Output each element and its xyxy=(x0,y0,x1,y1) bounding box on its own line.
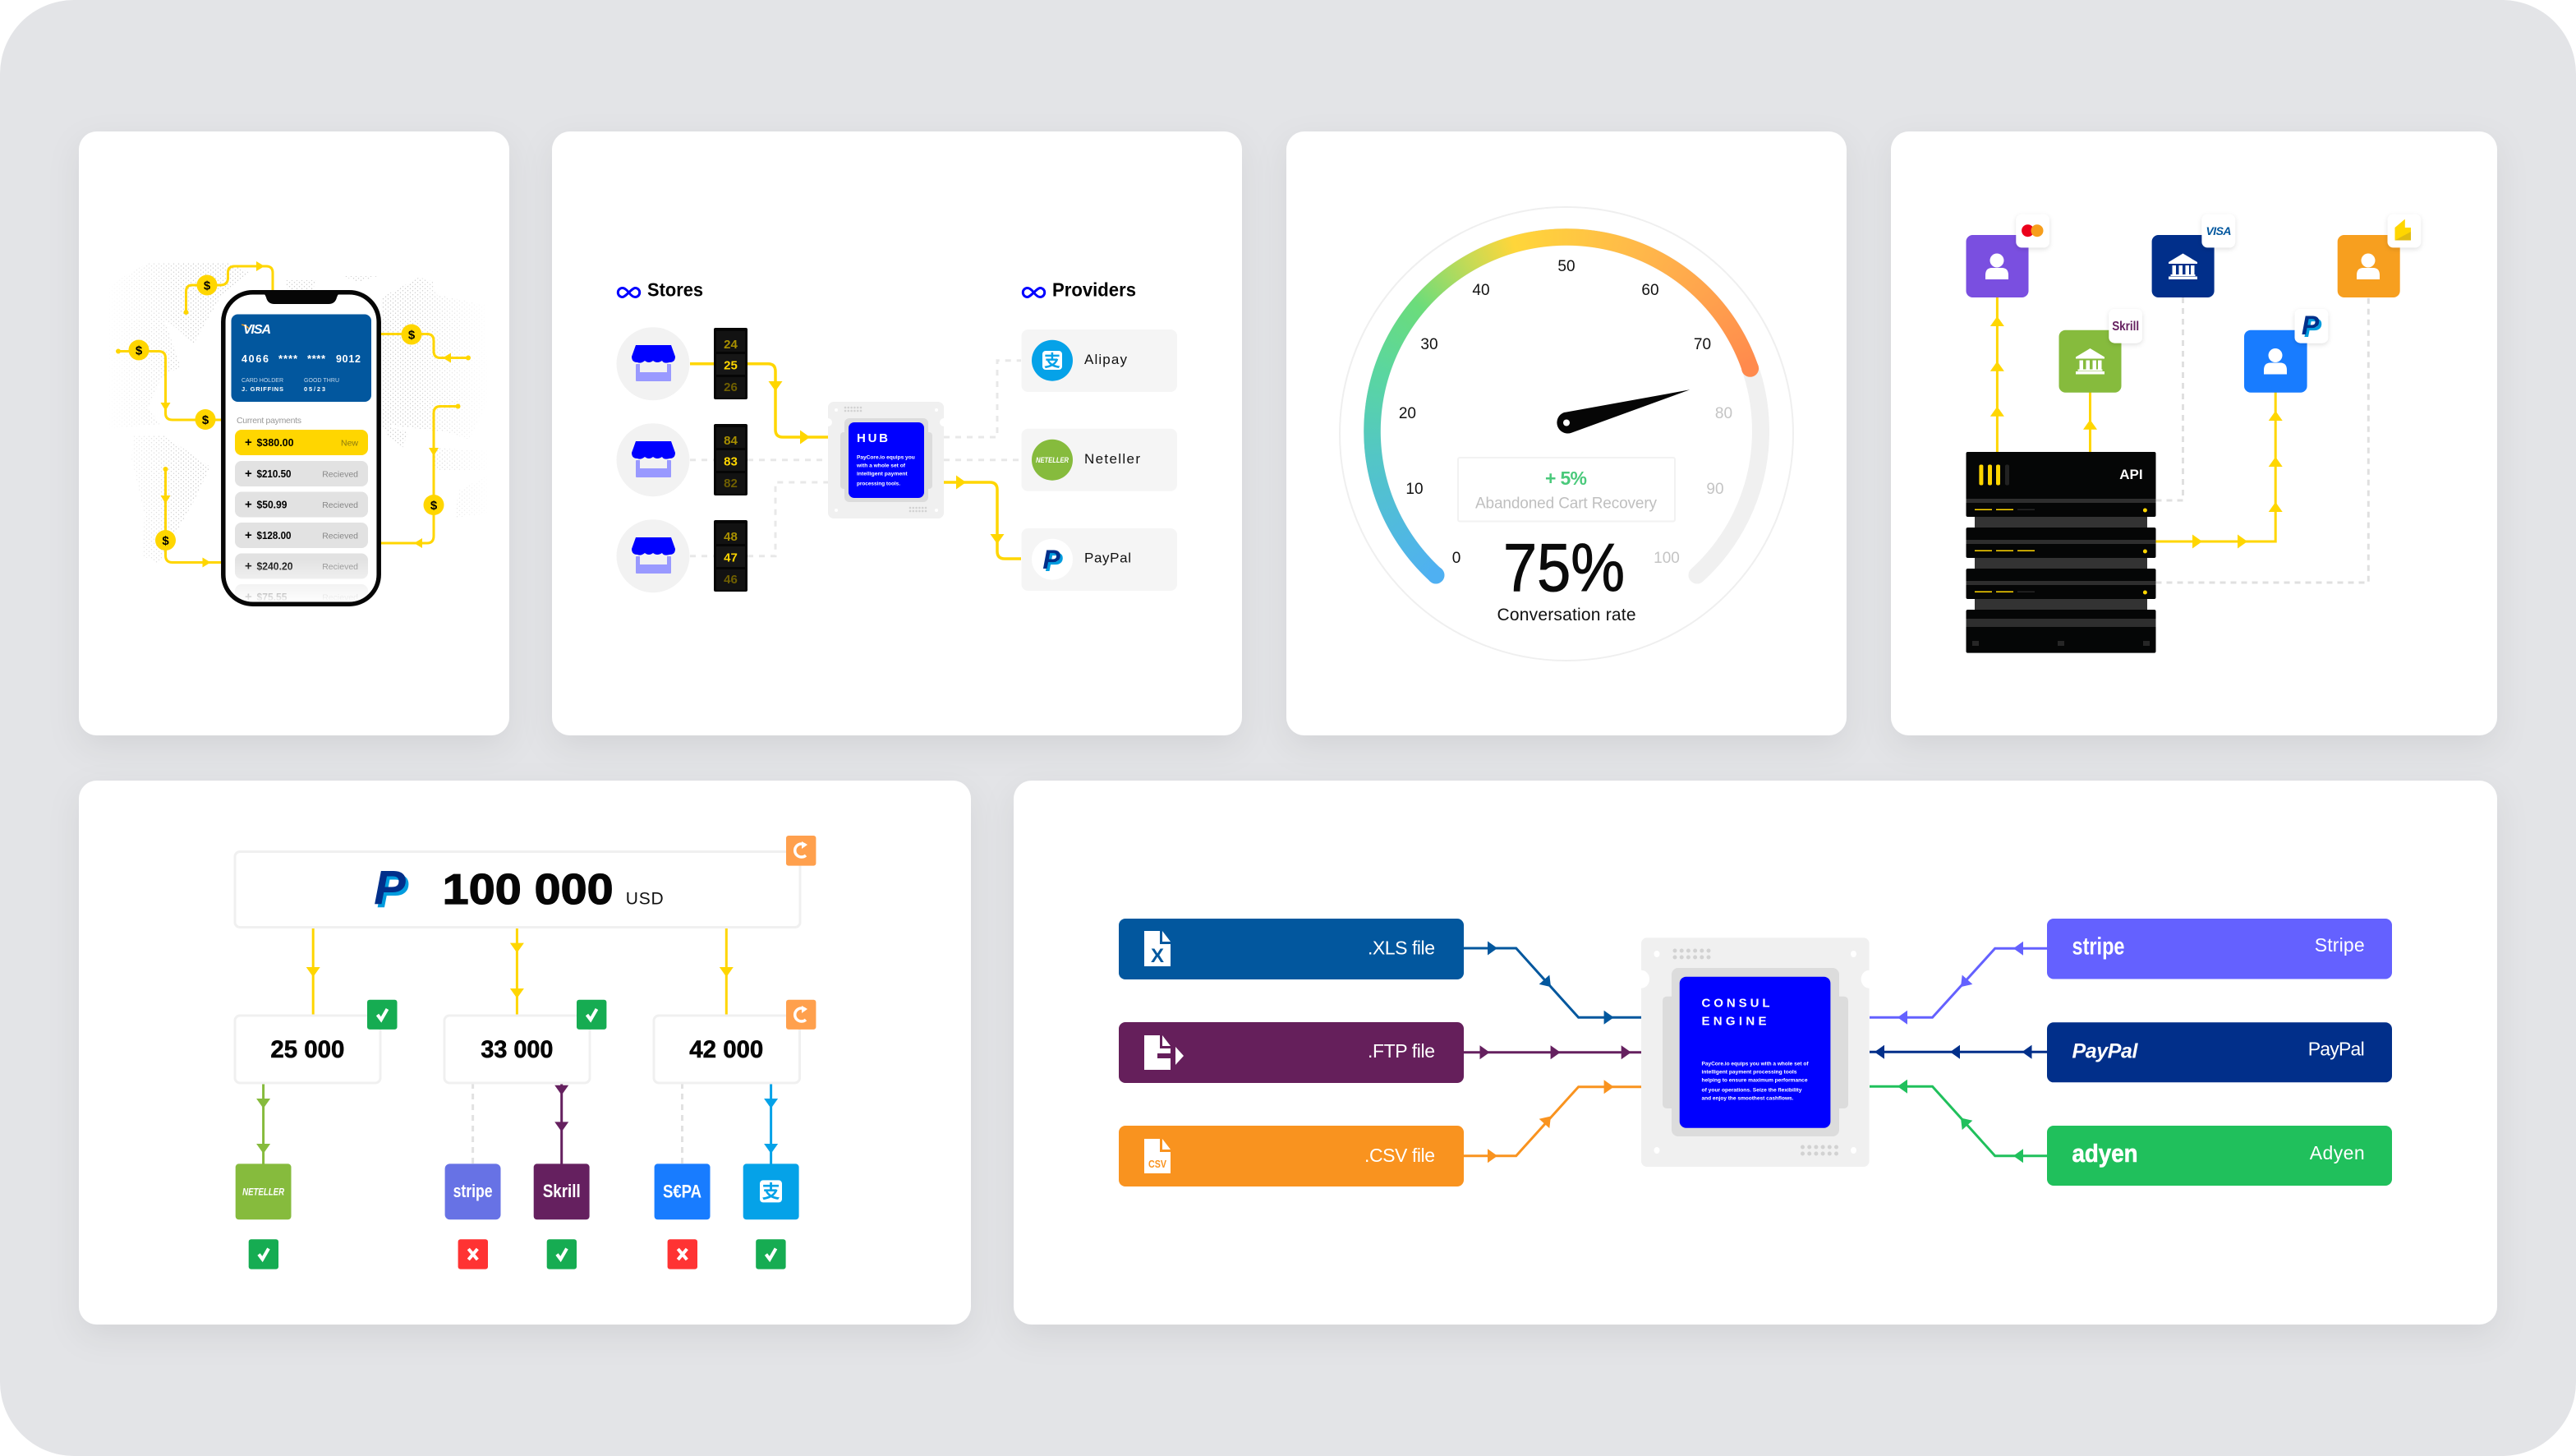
FTP connector xyxy=(1464,1045,1641,1059)
visa card: 05/23 xyxy=(304,385,325,393)
consul engine chip: PayCore.io equips you with a whole set of xyxy=(1702,1062,1809,1067)
total amount box: P xyxy=(374,861,406,915)
gauge scale labels: 30 xyxy=(1420,336,1438,353)
gauge needle xyxy=(1557,389,1690,433)
store 2 xyxy=(616,423,690,496)
gauge outer ring xyxy=(1340,207,1793,661)
amount 33 000 xyxy=(444,1000,606,1083)
visa card: CARD HOLDER xyxy=(242,378,283,384)
FTP file bar: .FTP file xyxy=(1368,1040,1435,1062)
ticker 1: 24 xyxy=(724,338,738,352)
dollar coins: $ xyxy=(202,413,209,427)
current payments list: + xyxy=(245,590,252,604)
tile: Stripe: stripe xyxy=(453,1181,493,1201)
CSV file bar: .CSV file xyxy=(1364,1145,1435,1166)
current payments list: $50.99 xyxy=(256,498,288,511)
ticker 1: 25 xyxy=(724,358,738,373)
consul engine chip: intelligent payment processing tools xyxy=(1702,1070,1797,1076)
provider: Neteller: NETELLER xyxy=(1036,456,1069,464)
panel: API routing xyxy=(1891,131,2497,735)
result: SEPA failed xyxy=(668,1239,697,1269)
consul engine chip: and enjoy the smoothest cashflows. xyxy=(1702,1096,1794,1102)
tile: Skrill: Skrill xyxy=(543,1181,581,1201)
amount 42 000: 42 000 xyxy=(689,1036,763,1063)
gauge scale labels: 60 xyxy=(1641,282,1659,299)
conversation rate label: Conversation rate xyxy=(1497,606,1636,624)
result: Stripe failed xyxy=(458,1239,488,1269)
visa card: J. GRIFFINS xyxy=(242,385,283,393)
phone notch xyxy=(260,291,343,304)
current payments list xyxy=(230,417,372,601)
current payments list: Recieved xyxy=(322,531,358,541)
tile: user paypal: P xyxy=(2302,311,2320,340)
gauge scale labels: 50 xyxy=(1557,258,1576,275)
amount 25 000: 25 000 xyxy=(270,1036,344,1063)
hub chip: with a whole set of xyxy=(856,463,906,469)
panel: split payment xyxy=(79,781,971,1325)
tile: user wallet xyxy=(2338,214,2421,297)
current payments list: Recieved xyxy=(322,593,358,603)
panel: phone with global payments xyxy=(79,131,509,735)
hub chip: PayCore.io equips you xyxy=(857,455,915,461)
store 1 xyxy=(616,327,690,400)
abandoned cart recovery callout: Abandoned Cart Recovery xyxy=(1475,495,1658,513)
ticker 3: 47 xyxy=(724,551,738,565)
tile: bank visa: VISA xyxy=(2206,224,2231,237)
hub chip: intelligent payment xyxy=(857,472,908,477)
provider: Alipay xyxy=(1022,329,1177,392)
dollar coins: $ xyxy=(204,279,211,293)
dollar coins xyxy=(128,274,444,551)
heading: Providers: Providers xyxy=(1052,279,1136,301)
ticker 3 xyxy=(714,520,748,592)
tile: bank visa xyxy=(2152,214,2235,297)
total amount box: P xyxy=(377,864,409,918)
total amount box xyxy=(235,851,800,927)
result: Alipay ok xyxy=(756,1239,786,1269)
Stripe bar xyxy=(2047,919,2392,979)
flow endpoints and arrowheads xyxy=(116,261,471,567)
visa card xyxy=(232,314,371,402)
current payments list: $75.55 xyxy=(256,591,288,603)
gauge scale labels: 40 xyxy=(1472,282,1490,299)
visa card: GOOD THRU xyxy=(304,378,339,384)
dollar coins: $ xyxy=(162,534,169,548)
provider: PayPal: PayPal xyxy=(1084,551,1131,566)
CSV connector xyxy=(1464,1080,1641,1163)
tile: user paypal xyxy=(2244,309,2328,393)
ticker 2 xyxy=(714,424,748,495)
XLS connector xyxy=(1464,942,1641,1025)
XLS file bar xyxy=(1119,919,1464,979)
gauge scale labels: 20 xyxy=(1399,405,1416,422)
provider: Neteller: Neteller xyxy=(1084,451,1140,467)
yellow active connections xyxy=(1990,297,2283,549)
consul engine chip: helping to ensure maximum performance xyxy=(1702,1078,1808,1084)
visa card: **** xyxy=(278,352,298,365)
PayPal bar: PayPal xyxy=(2308,1039,2365,1060)
ticker 1: 26 xyxy=(724,380,738,394)
provider: PayPal: P xyxy=(1042,545,1060,574)
tile: SEPA: S€PA xyxy=(663,1182,702,1201)
API server rack: API xyxy=(2119,467,2143,482)
current payments list: + xyxy=(245,498,252,511)
consul engine chip: CONSUL xyxy=(1702,997,1769,1011)
gauge scale labels: 70 xyxy=(1694,336,1711,353)
gauge scale labels: 80 xyxy=(1715,405,1732,422)
current payments list: Recieved xyxy=(322,500,358,510)
XLS file bar: .XLS file xyxy=(1368,938,1435,959)
amount 25 000 xyxy=(235,1000,398,1083)
amount 33 000: 33 000 xyxy=(481,1036,553,1063)
tile: Alipay: 支 xyxy=(762,1182,780,1202)
Adyen bar xyxy=(2047,1126,2392,1186)
dotted world map xyxy=(104,263,489,564)
current payments list: $210.50 xyxy=(256,468,291,480)
75% value: 75% xyxy=(1503,529,1625,606)
panel: conversion gauge xyxy=(1286,131,1847,735)
ticker 3: 48 xyxy=(724,530,738,544)
PayPal bar xyxy=(2047,1022,2392,1082)
visa card: 4066 xyxy=(242,353,269,365)
current payments list: Recieved xyxy=(322,470,358,480)
Adyen bar: adyen xyxy=(2072,1139,2137,1168)
consul engine chip: of your operations. Seize the flexibility xyxy=(1702,1088,1802,1094)
current payments list: $380.00 xyxy=(256,436,294,449)
PayPal connector xyxy=(1870,1045,2047,1059)
tile: SEPA xyxy=(655,1163,710,1219)
hub chip: processing tools. xyxy=(857,481,900,487)
tile: Alipay xyxy=(743,1163,799,1219)
abandoned cart recovery callout: + 5% xyxy=(1545,468,1587,489)
provider: Neteller xyxy=(1022,429,1177,491)
tile: user paypal: P xyxy=(2304,313,2322,343)
tile: bank skrill: Skrill xyxy=(2112,320,2139,334)
tile: user mastercard xyxy=(1966,214,2049,297)
CSV file bar: CSV xyxy=(1148,1158,1166,1170)
gauge scale labels: 0 xyxy=(1452,550,1460,567)
total amount box: 100 000 xyxy=(443,866,614,914)
result: Neteller ok xyxy=(249,1239,278,1269)
gauge scale labels: 100 xyxy=(1654,550,1680,567)
heading: Stores xyxy=(618,279,703,301)
API server rack xyxy=(1966,452,2155,653)
consul engine chip xyxy=(1633,938,1878,1167)
panel: stores, hub and providers xyxy=(552,131,1242,735)
flow lines and arrows xyxy=(118,266,468,562)
Stripe connector xyxy=(1870,942,2047,1025)
gauge track xyxy=(1373,237,1761,575)
consul engine chip: ENGINE xyxy=(1702,1015,1766,1029)
Stripe bar: stripe xyxy=(2072,933,2124,961)
dashed inactive connections xyxy=(2155,297,2368,583)
store 3 xyxy=(616,519,690,592)
ticker 1 xyxy=(714,328,748,399)
hub chip: HUB xyxy=(857,431,888,445)
PayPal bar: PayPal xyxy=(2072,1040,2139,1063)
yellow active connections xyxy=(690,364,1021,559)
FTP file bar xyxy=(1119,1022,1464,1083)
panel: consul engine xyxy=(1014,781,2497,1325)
XLS file bar: X xyxy=(1151,945,1164,967)
gauge scale labels: 90 xyxy=(1706,481,1724,498)
current payments list: New xyxy=(341,439,358,449)
hub chip xyxy=(824,402,948,518)
phone xyxy=(223,291,379,610)
flow lines xyxy=(256,927,778,1164)
visa card: 9012 xyxy=(336,353,361,365)
amount 42 000 xyxy=(654,1000,816,1083)
provider: Alipay: 支 xyxy=(1044,352,1060,371)
Adyen connector xyxy=(1870,1080,2047,1163)
current payments list: $128.00 xyxy=(256,529,291,541)
dollar coins: $ xyxy=(408,329,416,342)
tile: bank skrill xyxy=(2058,309,2142,393)
provider: PayPal: P xyxy=(1045,547,1063,577)
dollar coins: $ xyxy=(430,499,438,513)
tile: Stripe xyxy=(445,1163,501,1219)
total amount box: USD xyxy=(626,890,664,909)
Stripe bar: Stripe xyxy=(2315,934,2365,956)
ticker 2: 84 xyxy=(724,434,738,448)
heading: Stores: Stores xyxy=(647,279,703,301)
current payments list: + xyxy=(245,559,252,574)
current payments list: Current payments xyxy=(237,416,301,426)
current payments list: Recieved xyxy=(322,562,358,572)
Adyen bar: Adyen xyxy=(2310,1142,2365,1163)
gauge scale labels: 10 xyxy=(1405,481,1424,498)
visa card: VISA xyxy=(243,323,271,337)
current payments list: $240.20 xyxy=(256,560,292,572)
tile: Skrill xyxy=(534,1163,590,1219)
CSV file bar xyxy=(1119,1126,1464,1186)
abandoned cart recovery callout xyxy=(1458,458,1675,521)
result: Skrill ok xyxy=(547,1239,577,1269)
dashed inactive connections xyxy=(690,361,1021,556)
ticker 3: 46 xyxy=(724,573,738,587)
visa card: **** xyxy=(307,352,326,365)
status badge: pending total xyxy=(786,836,816,866)
provider: Alipay: Alipay xyxy=(1084,352,1127,367)
current payments list: + xyxy=(245,528,252,542)
ticker 2: 83 xyxy=(724,455,738,468)
tile: Neteller: NETELLER xyxy=(242,1186,284,1198)
ticker 2: 82 xyxy=(724,477,738,491)
current payments list: + xyxy=(245,435,252,449)
gauge coloured arc xyxy=(1364,228,1760,583)
tile: Neteller xyxy=(236,1163,291,1219)
dollar coins: $ xyxy=(136,343,143,358)
provider: PayPal xyxy=(1022,528,1177,591)
current payments list: + xyxy=(245,467,252,481)
gauge scale labels xyxy=(1399,258,1732,567)
